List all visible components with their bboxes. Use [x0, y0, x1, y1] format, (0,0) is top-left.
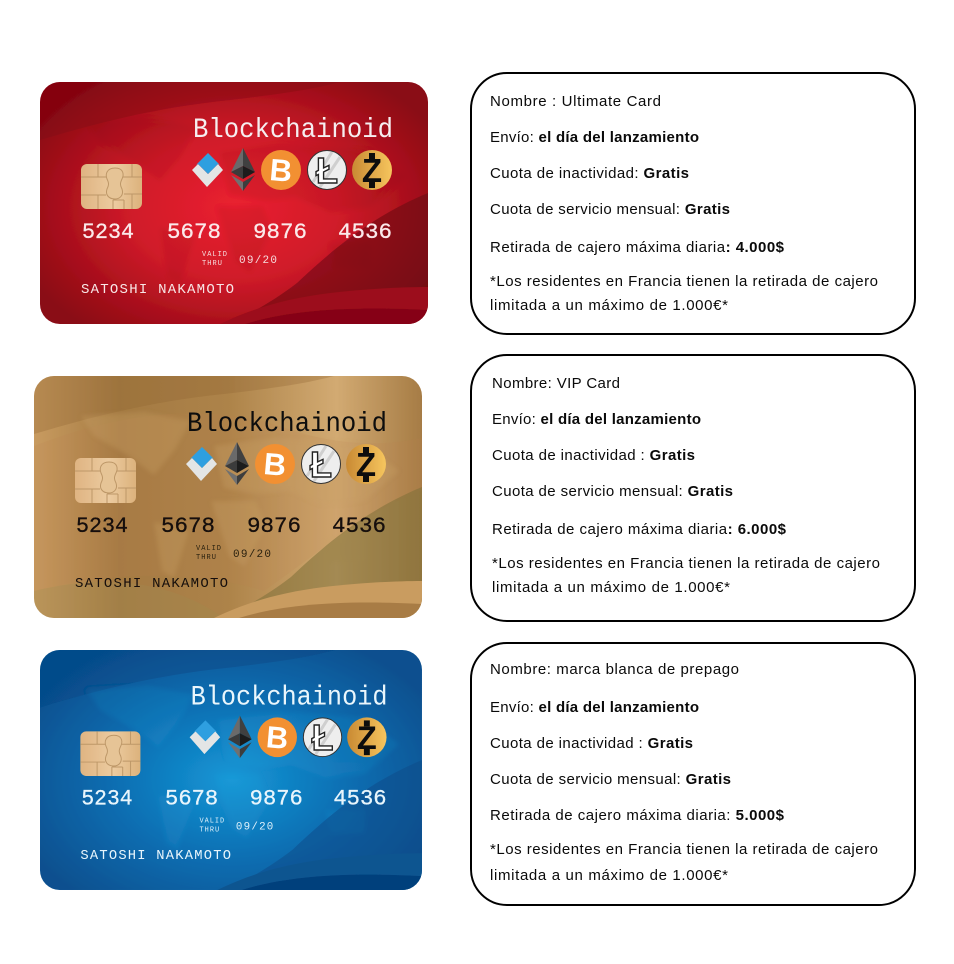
card number — [76, 514, 386, 539]
brand name: Blockchainoid — [191, 682, 388, 714]
panel: Ultimate Card details: *Los residentes en Francia tienen la retirada de cajero — [490, 273, 878, 290]
panel: VIP Card details: Nombre: VIP Card — [492, 375, 620, 392]
valid thru — [202, 251, 277, 268]
brand name: Blockchainoid — [193, 115, 393, 146]
panel: white-label prepaid details: limitada a un máximo de 1.000€* — [490, 867, 728, 884]
panel: VIP Card details: limitada a un máximo de 1.000€* — [492, 579, 730, 596]
cardholder name: SATOSHI NAKAMOTO — [75, 576, 228, 592]
panel: white-label prepaid details: Cuota de servicio mensual: Gratis — [490, 771, 731, 788]
panel: Ultimate Card details: Envío: el día del lanzamiento — [490, 129, 699, 146]
panel: white-label prepaid details: Nombre: marca blanca de prepago — [490, 661, 739, 678]
world map — [86, 413, 265, 574]
valid thru: THRU — [199, 826, 219, 834]
icon: litecoin: Ł — [312, 718, 333, 758]
valid thru — [199, 818, 273, 834]
icon: ethereum — [231, 148, 255, 191]
valid thru: VALID — [196, 545, 221, 553]
panel: VIP Card details: Retirada de cajero máxima diaria: 6.000$ — [492, 521, 787, 538]
card number: 5234 — [81, 787, 133, 812]
card number: 4536 — [333, 787, 387, 812]
icon: litecoin — [303, 718, 342, 758]
panel: white-label prepaid details — [471, 643, 915, 905]
valid thru: THRU — [196, 554, 216, 562]
card number: 5678 — [161, 514, 215, 539]
card number: 4536 — [338, 220, 392, 245]
panel: Ultimate Card details: Cuota de inactividad: Gratis — [490, 165, 689, 182]
card number: 5678 — [165, 787, 218, 812]
world map — [86, 686, 399, 850]
panel: red card — [40, 82, 428, 324]
icon: bitcoin — [258, 717, 297, 757]
chip — [75, 458, 136, 503]
card number: 4536 — [332, 514, 386, 539]
card number: 9876 — [247, 514, 301, 539]
card number: 9876 — [250, 787, 303, 812]
icon: zcash — [346, 444, 386, 484]
card number: 5678 — [167, 220, 221, 245]
icon: ethereum — [228, 715, 252, 758]
icon: waves — [186, 447, 217, 481]
icon: zcash — [352, 150, 392, 190]
panel: blue card — [40, 650, 422, 890]
panel: white-label prepaid details: Envío: el día del lanzamiento — [490, 699, 699, 716]
icon: litecoin — [302, 444, 340, 485]
icon: bitcoin — [255, 444, 295, 484]
valid thru — [196, 545, 271, 562]
chip — [80, 731, 140, 776]
panel: VIP Card details: Envío: el día del lanzamiento — [492, 411, 701, 428]
panel: Ultimate Card details: limitada a un máximo de 1.000€* — [490, 297, 728, 314]
card number — [81, 787, 387, 812]
panel: Ultimate Card details: Nombre : Ultimate Card — [490, 93, 661, 110]
icon: zcash: Z — [357, 719, 377, 756]
panel: VIP Card details: *Los residentes en Francia tienen la retirada de cajero — [492, 555, 880, 572]
valid thru: VALID — [202, 251, 227, 259]
icon: bitcoin: B — [265, 720, 290, 756]
panel: VIP Card details: Cuota de servicio mensual: Gratis — [492, 483, 733, 500]
panel: white-label prepaid details: *Los residentes en Francia tienen la retirada de cajero — [490, 841, 878, 858]
world map — [87, 118, 405, 284]
icon: litecoin: Ł — [316, 150, 338, 191]
valid thru: THRU — [202, 260, 222, 268]
panel: white-label prepaid details: Cuota de inactividad : Gratis — [490, 735, 693, 752]
icon: litecoin: Ł — [310, 444, 332, 485]
valid thru: 09/20 — [236, 821, 273, 834]
icon: zcash: Z — [356, 446, 376, 483]
panel: Ultimate Card details: Retirada de cajero máxima diaria: 4.000$ — [490, 239, 785, 256]
chip — [81, 164, 142, 209]
icon: ethereum — [225, 442, 249, 485]
panel: VIP Card details: Cuota de inactividad : Gratis — [492, 447, 695, 464]
card number: 5234 — [82, 220, 134, 245]
brand name: Blockchainoid — [187, 409, 387, 440]
icon: litecoin — [308, 150, 346, 191]
cardholder name: SATOSHI NAKAMOTO — [81, 282, 234, 298]
icon: waves — [190, 720, 220, 754]
panel: Ultimate Card details — [471, 73, 915, 334]
panel: white-label prepaid details: Retirada de cajero máxima diaria: 5.000$ — [490, 807, 785, 824]
valid thru: 09/20 — [233, 549, 271, 561]
panel: VIP Card details — [471, 355, 915, 621]
panel: Ultimate Card details: Cuota de servicio mensual: Gratis — [490, 201, 730, 218]
valid thru: VALID — [199, 818, 224, 826]
icon: bitcoin: B — [262, 446, 288, 483]
valid thru: 09/20 — [239, 255, 277, 267]
card number: 5234 — [76, 514, 128, 539]
icon: waves — [192, 153, 223, 187]
card number: 9876 — [253, 220, 307, 245]
card number — [82, 220, 392, 245]
icon: zcash: Z — [362, 152, 382, 189]
icon: bitcoin: B — [268, 152, 294, 189]
cardholder name: SATOSHI NAKAMOTO — [80, 848, 231, 864]
panel: gold card — [34, 376, 422, 618]
icon: bitcoin — [261, 150, 301, 190]
icon: zcash — [347, 717, 387, 757]
